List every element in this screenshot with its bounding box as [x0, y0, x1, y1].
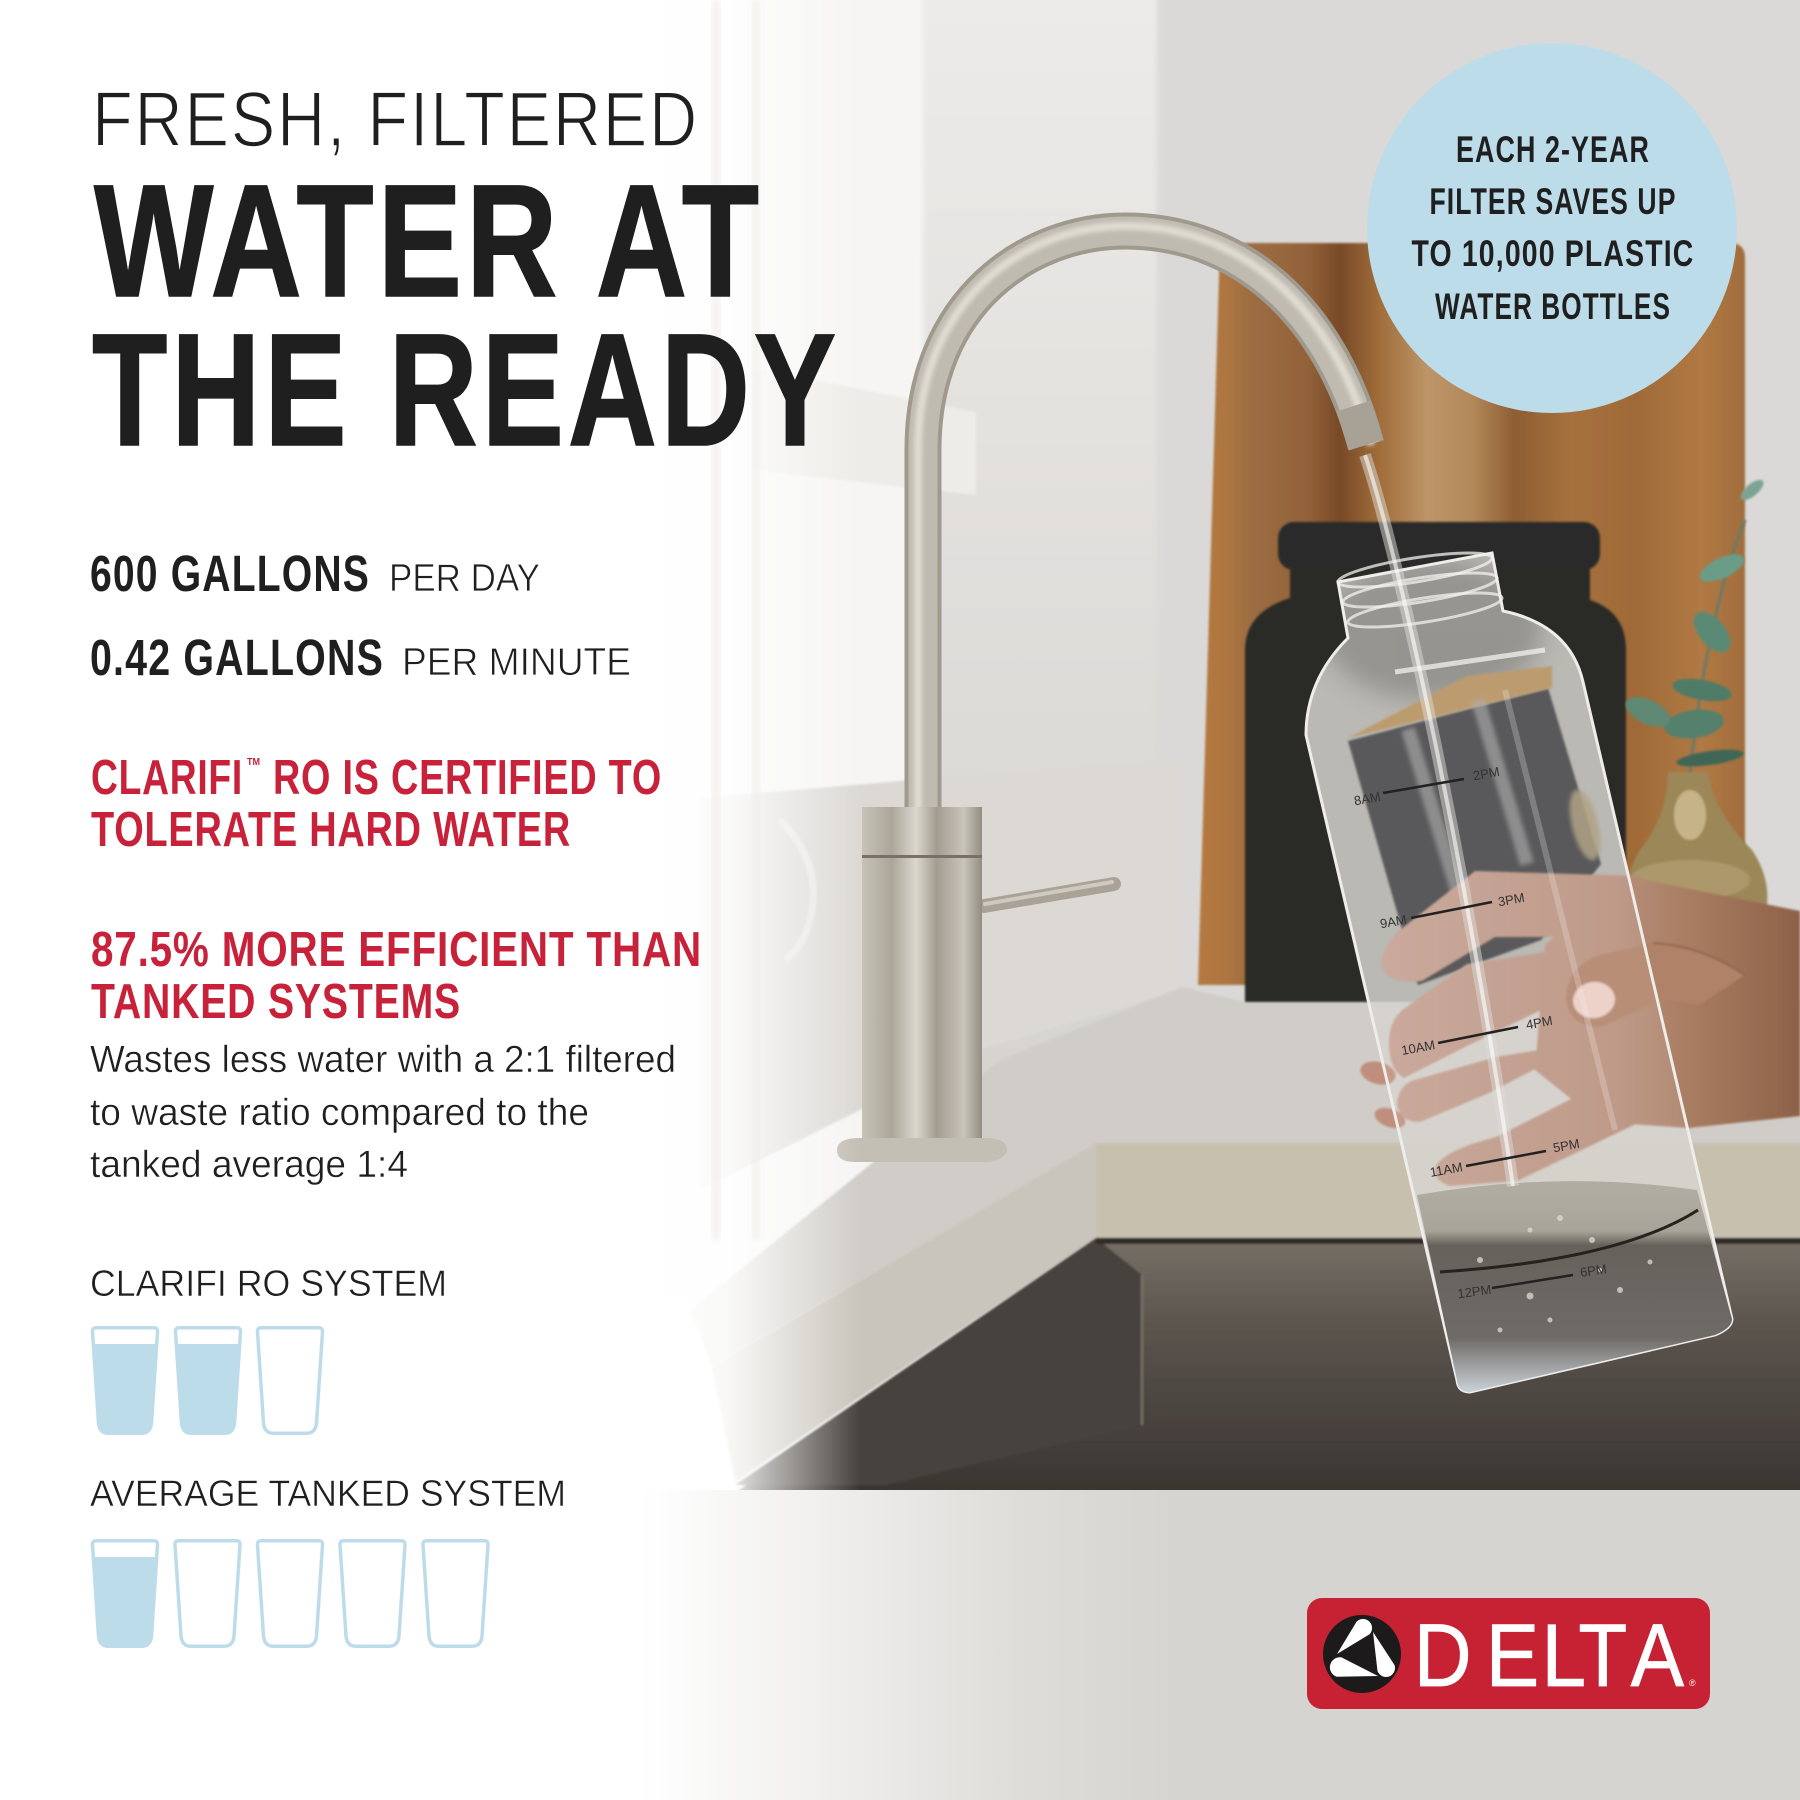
Delta logo: DELTA	[1414, 1605, 1685, 1705]
plant leaves	[1621, 476, 1767, 772]
bottle outline	[1306, 553, 1732, 1392]
bottle body	[1306, 553, 1732, 1392]
thumb	[1566, 943, 1745, 1027]
wood reflection on shoulder	[1348, 666, 1552, 738]
bottle neck threads and highlights	[1336, 546, 1615, 1130]
time scale: 11AM 5PM	[1429, 1136, 1581, 1180]
faucet	[837, 226, 1371, 1162]
faucet lever handle	[984, 882, 1114, 906]
faucet body	[837, 807, 1007, 1162]
time scale: 9AM 3PM	[1379, 890, 1526, 931]
callout: plastic bottles saved: WATER BOTTLES	[1435, 286, 1671, 327]
title	[92, 75, 840, 479]
hard water certification: RO IS CERTIFIED TO	[273, 751, 662, 805]
efficiency claim: TANKED SYSTEMS	[91, 975, 461, 1029]
callout: plastic bottles saved: EACH 2-YEAR	[1456, 129, 1650, 170]
wall shelf ledge	[752, 368, 976, 495]
time scale: 11AM 5PM: 5PM	[1552, 1136, 1581, 1155]
time scale: 12PM 6PM: 6PM	[1579, 1261, 1608, 1280]
time scale: 12PM 6PM: 12PM	[1457, 1282, 1492, 1301]
gold reflection	[1564, 787, 1606, 863]
jar seen through neck and shoulder	[1322, 560, 1542, 700]
efficiency claim	[91, 923, 702, 1029]
efficiency description: to waste ratio compared to the	[90, 1092, 589, 1134]
glass filled	[92, 1328, 158, 1435]
efficiency description: Wastes less water with a 2:1 filtered	[90, 1039, 676, 1081]
glass empty	[257, 1541, 323, 1646]
time scale: 10AM 4PM	[1400, 1013, 1554, 1058]
index finger	[1381, 871, 1650, 982]
title: FRESH, FILTERED	[92, 75, 699, 163]
title: THE READY	[92, 300, 840, 479]
little finger	[1435, 1090, 1640, 1186]
time scale: 10AM 4PM: 4PM	[1525, 1013, 1554, 1032]
counter front lip	[712, 1143, 1800, 1482]
Delta logo: ®	[1689, 1678, 1696, 1688]
faucet shadow ring on backsplash	[780, 820, 813, 960]
counter top	[690, 987, 1800, 1366]
time scale: 11AM 5PM: 11AM	[1429, 1159, 1464, 1180]
title: WATER AT	[94, 151, 763, 330]
glass empty	[175, 1541, 240, 1646]
ring finger	[1397, 1040, 1610, 1122]
lower counter foreground	[640, 1490, 1800, 1800]
efficiency description: tanked average 1:4	[90, 1144, 408, 1186]
thumb nail	[1571, 979, 1617, 1021]
gold vase	[1625, 772, 1767, 912]
hard water certification: CLARIFI	[91, 751, 243, 805]
water in bottle	[1417, 1181, 1732, 1392]
water bottle details	[1306, 455, 1732, 1392]
water stream	[1365, 455, 1513, 1186]
water line arc	[1440, 1210, 1698, 1272]
time scale: 9AM 3PM: 3PM	[1497, 890, 1526, 909]
callout: plastic bottles saved: TO 10,000 PLASTIC	[1412, 233, 1694, 274]
time scale: 9AM 3PM: 9AM	[1379, 912, 1408, 931]
wall	[600, 0, 1800, 1300]
glass empty	[340, 1541, 405, 1646]
photo: kitchen background	[600, 0, 1800, 1493]
middle finger	[1389, 950, 1590, 1078]
Delta logo	[1307, 1598, 1710, 1709]
efficiency description	[90, 1039, 676, 1186]
hard water certification: TM	[247, 757, 260, 768]
bubbles	[1477, 1215, 1652, 1332]
flow rate per minute: 0.42 GALLONS	[90, 629, 384, 686]
water bottle glass	[1308, 555, 1722, 1304]
tanked system label: AVERAGE TANKED SYSTEM	[90, 1473, 566, 1514]
time scale: 10AM 4PM: 10AM	[1400, 1037, 1436, 1058]
glass filled	[175, 1328, 241, 1435]
glass empty	[257, 1328, 323, 1433]
flow rate per day: PER DAY	[389, 557, 540, 600]
hard water certification: TOLERATE HARD WATER	[91, 803, 571, 857]
stainless steel sink	[735, 1238, 1800, 1493]
callout: plastic bottles saved: FILTER SAVES UP	[1430, 181, 1676, 222]
Clarifi RO glasses: two filled, one empty	[92, 1328, 323, 1435]
hand holding bottle	[1358, 871, 1800, 1186]
time scale: 8AM 2PM: 2PM	[1472, 764, 1501, 783]
flow rate per day: 600 GALLONS	[90, 545, 370, 602]
tanked glasses: one filled, four empty	[92, 1541, 488, 1648]
efficiency claim: 87.5% MORE EFFICIENT THAN	[91, 923, 702, 977]
marble backsplash	[700, 757, 1182, 1190]
hard water certification	[91, 751, 662, 857]
time scale: 12PM 6PM	[1457, 1261, 1608, 1301]
flow rate per minute: PER MINUTE	[402, 641, 631, 684]
pale reflection stripes	[1408, 700, 1527, 899]
time scale: 8AM 2PM: 8AM	[1353, 789, 1382, 808]
faucet neck	[918, 226, 1371, 812]
glass filled	[92, 1541, 158, 1648]
callout: plastic bottles saved	[1367, 43, 1737, 413]
icon: Delta triangle mark	[1323, 1615, 1401, 1693]
glass empty	[423, 1541, 488, 1646]
fingertips behind bottle	[1358, 1058, 1408, 1132]
cutting board	[1198, 243, 1745, 985]
palm and wrist	[1535, 876, 1800, 1128]
white fade over photo left edge	[0, 0, 860, 1800]
jar reflection through glass	[1348, 688, 1601, 985]
time scale: 8AM 2PM	[1353, 764, 1501, 808]
Clarifi RO label: CLARIFI RO SYSTEM	[90, 1263, 447, 1304]
black jar	[1245, 522, 1626, 1004]
